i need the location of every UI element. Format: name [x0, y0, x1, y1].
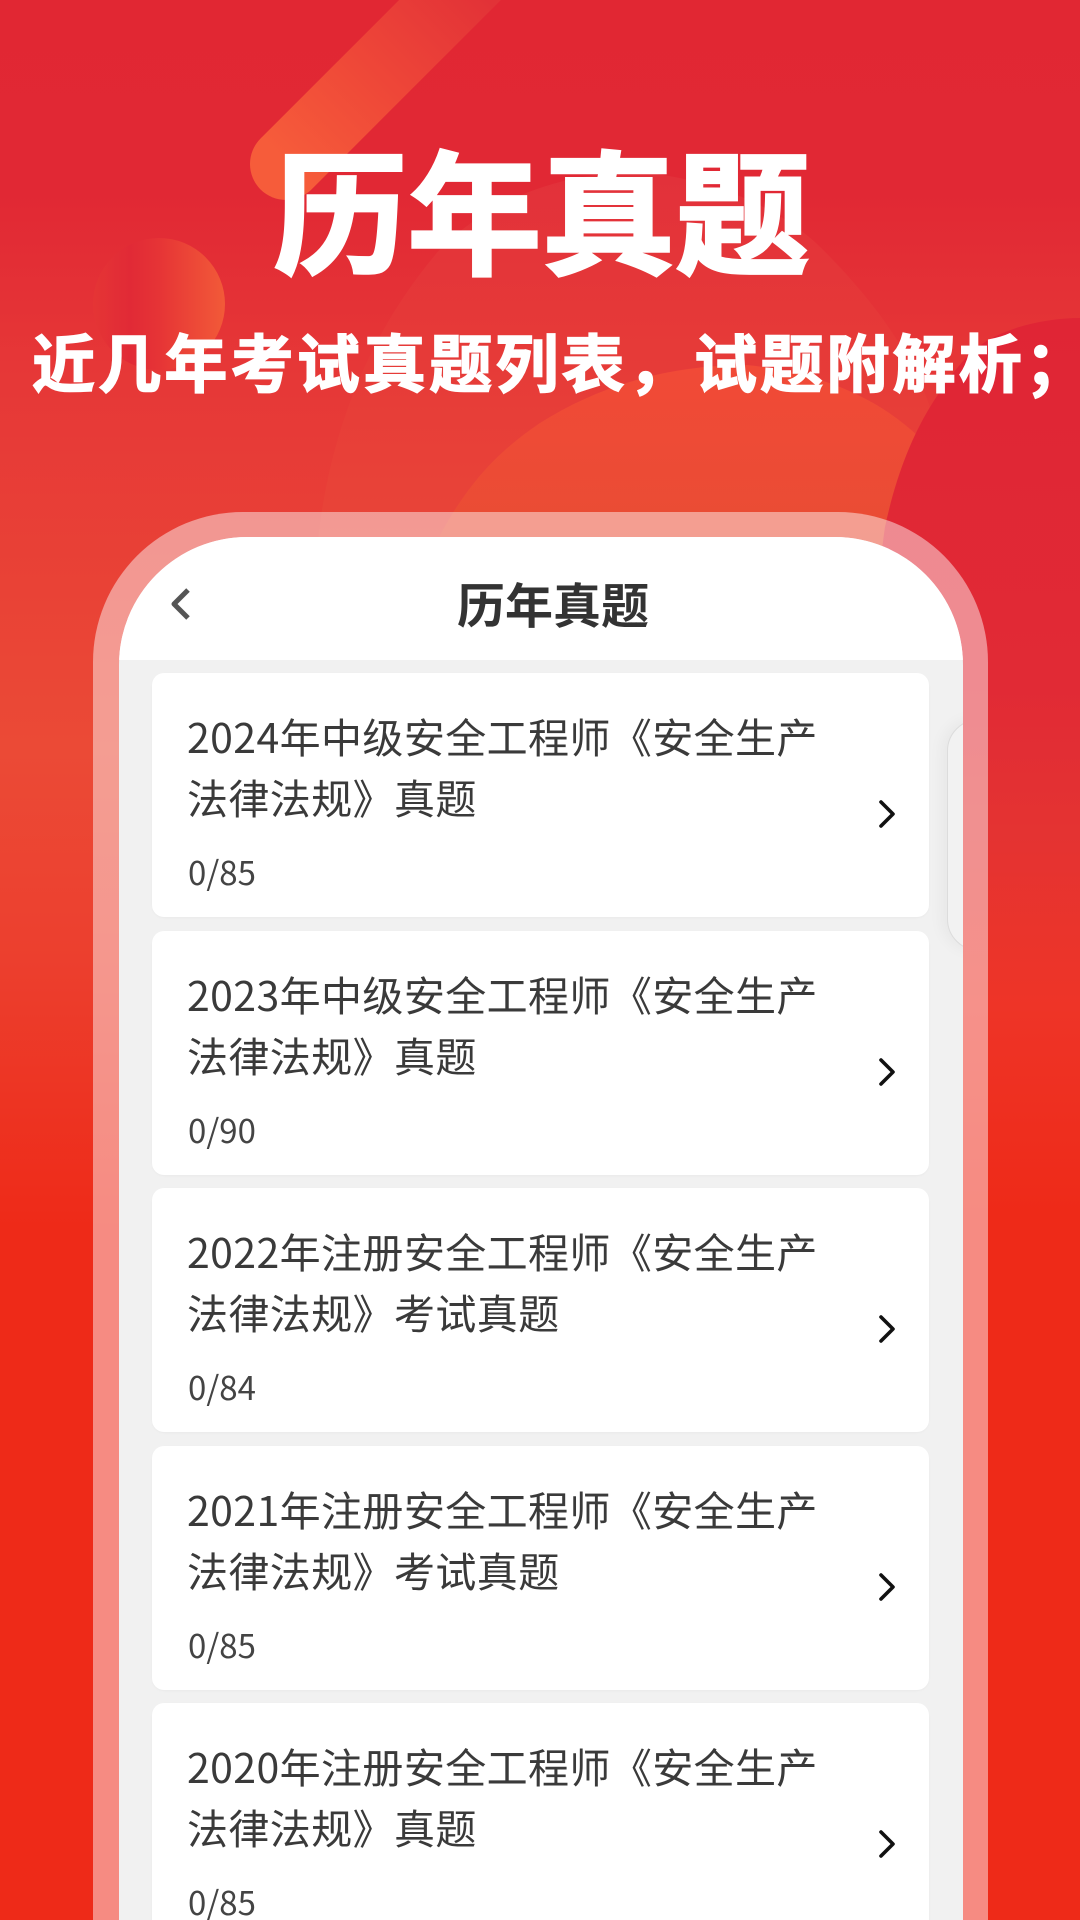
icon: chevron	[879, 1830, 895, 1858]
card progress: 0/84	[188, 1362, 256, 1410]
card title: 2020年注册安全工程师《安全生产	[187, 1735, 818, 1795]
card: 2021	[152, 1446, 929, 1690]
icon: chevron	[879, 1573, 895, 1601]
card title: 2021年注册安全工程师《安全生产	[187, 1478, 818, 1538]
icon: back chevron	[172, 588, 190, 620]
card: 2024	[152, 673, 929, 917]
card title: 2022年注册安全工程师《安全生产	[187, 1220, 818, 1280]
subtitle: 近几年考试真题列表，试题附解析；	[32, 315, 1080, 406]
card title: 法律法规》真题	[187, 1024, 477, 1084]
card title	[187, 1478, 818, 1598]
phone frame	[93, 512, 988, 1920]
card progress: 0/90	[188, 1104, 256, 1152]
card title: 2023年中级安全工程师《安全生产	[187, 962, 818, 1022]
card: 2022	[152, 1188, 929, 1432]
title: 历年真题	[273, 109, 810, 303]
card title: 法律法规》考试真题	[187, 1538, 560, 1598]
side tab	[947, 719, 1027, 951]
card progress: 0/85	[188, 1620, 256, 1668]
icon: chevron	[879, 1058, 895, 1086]
card title: 法律法规》真题	[187, 766, 477, 826]
icon: chevron	[879, 800, 895, 828]
card title: 2024年中级安全工程师《安全生产	[187, 705, 818, 765]
card title	[187, 1220, 818, 1341]
icon: chevron	[879, 1315, 895, 1343]
card title	[187, 705, 818, 826]
card title	[187, 962, 818, 1084]
card title: 法律法规》考试真题	[187, 1281, 560, 1341]
card title	[187, 1735, 818, 1856]
phone screen	[119, 537, 963, 1920]
app header bar	[119, 537, 963, 660]
card progress: 0/85	[188, 847, 256, 895]
card: 2023	[152, 930, 929, 1174]
card: 2020	[152, 1703, 929, 1920]
header title: 历年真题	[457, 567, 649, 637]
card title: 法律法规》真题	[187, 1796, 477, 1856]
